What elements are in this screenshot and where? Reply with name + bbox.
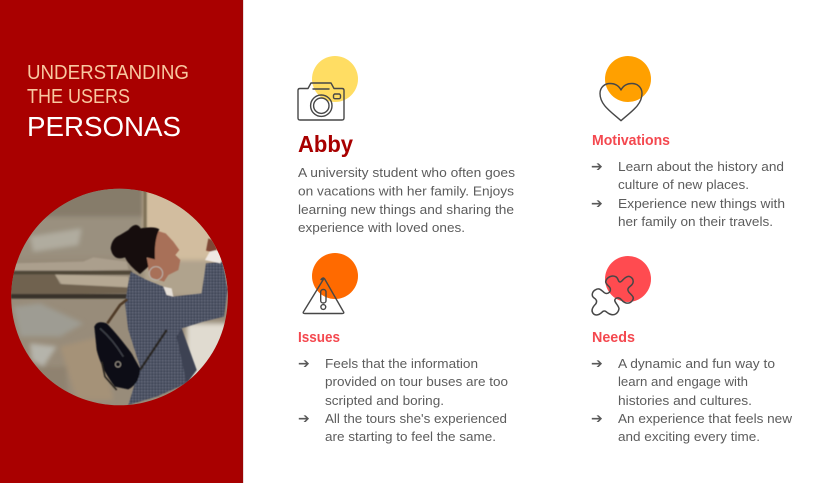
list: motivations: culture of new places. (618, 177, 749, 192)
hair (111, 225, 159, 274)
icon: camera on yellow circle (298, 56, 358, 120)
panel: red sidebar (0, 0, 244, 483)
backpack (94, 322, 140, 389)
icon: heart on orange circle (600, 56, 651, 121)
list: motivations: ➔ (591, 196, 603, 212)
list: motivations: Learn about the history and (618, 159, 784, 174)
heading: Abby: Abby (298, 131, 353, 157)
list: motivations: her family on their travels. (618, 214, 773, 229)
heading: Issues: Issues (298, 330, 340, 346)
list: issues: All the tours she's experienced (325, 411, 507, 426)
list: motivations: Experience new things with (618, 196, 785, 211)
list: issues: are starting to feel the same. (325, 429, 496, 444)
list: needs (591, 356, 793, 444)
icon: warning triangle on dark orange circle (303, 253, 358, 314)
list: issues (298, 356, 508, 444)
title: UNDERSTANDING (27, 62, 189, 84)
list: motivations: ➔ (591, 159, 603, 175)
jacket (125, 262, 228, 405)
list: issues: ➔ (298, 411, 310, 427)
text block: Abby description (298, 165, 516, 235)
list: needs: histories and cultures. (618, 393, 752, 408)
text block: Abby description: experience with loved ones. (298, 220, 465, 235)
list: needs: ➔ (591, 356, 603, 372)
list: issues: ➔ (298, 356, 310, 372)
heading: Motivations: Motivations (592, 133, 670, 149)
title (27, 62, 189, 142)
list: needs: An experience that feels new (618, 411, 793, 426)
text block: Abby description: on vacations with her family. Enjoys (298, 184, 515, 198)
list: issues: scripted and boring. (325, 393, 444, 408)
list: issues: Feels that the information (325, 356, 478, 371)
list: issues: provided on tour buses are too (325, 374, 508, 389)
text block: Abby description: learning new things and sharing the (298, 202, 514, 217)
list: motivations (591, 159, 785, 229)
icon: puzzle piece on red circle (592, 256, 651, 315)
list: needs: learn and engage with (618, 374, 748, 389)
face (147, 231, 180, 282)
title: THE USERS (27, 86, 130, 108)
title: PERSONAS (27, 111, 181, 142)
list: needs: ➔ (591, 411, 603, 427)
list: needs: A dynamic and fun way to (618, 356, 775, 371)
list: needs: and exciting every time. (618, 429, 760, 444)
heading: Needs: Needs (592, 330, 635, 346)
photo: woman with backpack in front of a stone wall (11, 188, 228, 406)
text block: Abby description: A university student who often goes (298, 165, 516, 180)
